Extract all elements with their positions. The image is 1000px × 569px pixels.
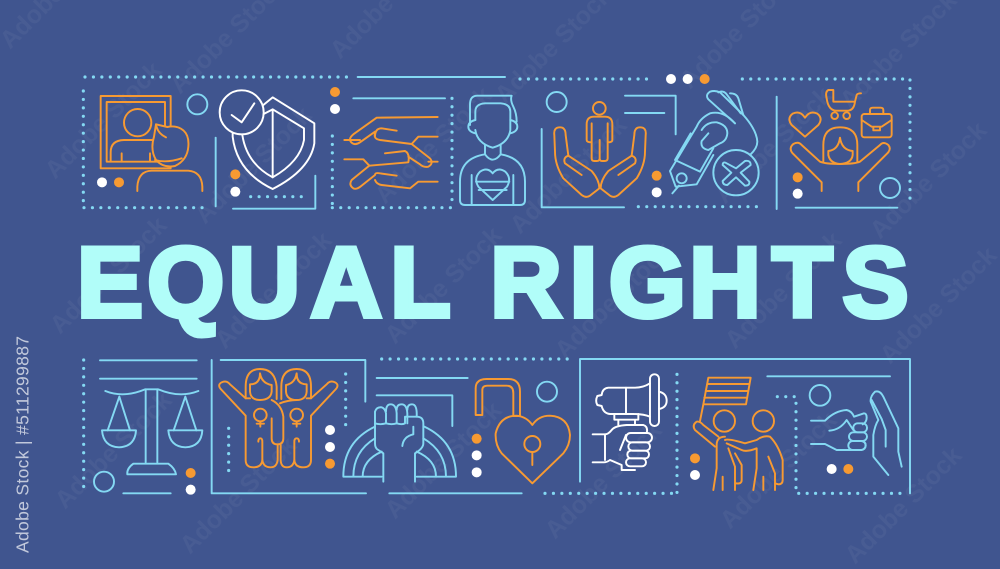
icon: joined hands bbox=[344, 117, 438, 189]
icon: scales of justice bbox=[102, 389, 202, 474]
circle accent bbox=[810, 385, 830, 406]
circle accent bbox=[187, 94, 207, 114]
icon: fist against open hand bbox=[811, 391, 902, 475]
icon: protesters with flag bbox=[694, 378, 783, 490]
icon: person in open hands bbox=[554, 102, 646, 197]
icon: two women bbox=[219, 369, 337, 467]
watermark pattern: Adobe Stock bbox=[864, 116, 992, 244]
icon: heart padlock bbox=[476, 379, 570, 483]
watermark pattern: Adobe Stock bbox=[839, 441, 967, 569]
frame lines bbox=[83, 77, 505, 209]
watermark pattern: Adobe Stock bbox=[44, 211, 172, 339]
watermark pattern: Adobe Stock bbox=[379, 221, 507, 349]
bullet dots bbox=[97, 87, 340, 197]
icon: baby stroller bbox=[826, 90, 861, 119]
watermark pattern: Adobe Stock bbox=[174, 431, 302, 559]
icon: woman with raised arms bbox=[791, 127, 890, 191]
frame lines bbox=[520, 79, 910, 209]
watermark pattern: Adobe Stock bbox=[709, 81, 837, 209]
icon: briefcase bbox=[862, 108, 892, 137]
watermark pattern: Adobe Stock bbox=[49, 386, 177, 514]
circle accents bbox=[94, 382, 557, 492]
icon: heart bbox=[789, 112, 821, 137]
circle accents bbox=[547, 92, 900, 198]
watermark pattern: Adobe Stock bbox=[189, 101, 317, 229]
icon: hand with tag and cross bbox=[670, 91, 759, 195]
watermark pattern: Adobe Stock bbox=[714, 406, 842, 534]
title: EQUAL RIGHTS bbox=[77, 226, 909, 338]
bullet dots bbox=[186, 425, 482, 495]
watermark pattern: Adobe Stock bbox=[369, 81, 497, 209]
bullet dots bbox=[690, 453, 853, 480]
watermark pattern: Adobe Stock bbox=[39, 56, 167, 184]
stock id side text: Adobe Stock | #511299887 bbox=[12, 336, 32, 553]
frame lines bbox=[545, 359, 910, 493]
watermark pattern: Adobe Stock bbox=[504, 111, 632, 239]
watermark pattern: Adobe Stock bbox=[874, 241, 1000, 369]
watermark pattern: Adobe Stock bbox=[209, 226, 337, 354]
bullet dots bbox=[652, 74, 803, 199]
icon: person with heart bbox=[460, 96, 525, 205]
watermark pattern: Adobe Stock bbox=[719, 226, 847, 354]
panel: top left icons bbox=[83, 77, 525, 209]
icon: portrait and viewer bbox=[101, 96, 202, 191]
icon: fist over rainbow bbox=[343, 404, 456, 482]
watermark pattern: Adobe Stock bbox=[549, 236, 677, 364]
icon: hand with megaphone bbox=[593, 374, 667, 470]
icon: shield with check bbox=[220, 90, 314, 189]
panel: top right icons bbox=[520, 74, 910, 209]
panel: bottom left icons bbox=[84, 359, 570, 495]
watermark pattern: Adobe Stock bbox=[539, 416, 667, 544]
frame lines bbox=[84, 359, 568, 493]
watermark pattern: Adobe Stock bbox=[379, 396, 507, 524]
panel: bottom right icons bbox=[545, 359, 910, 493]
